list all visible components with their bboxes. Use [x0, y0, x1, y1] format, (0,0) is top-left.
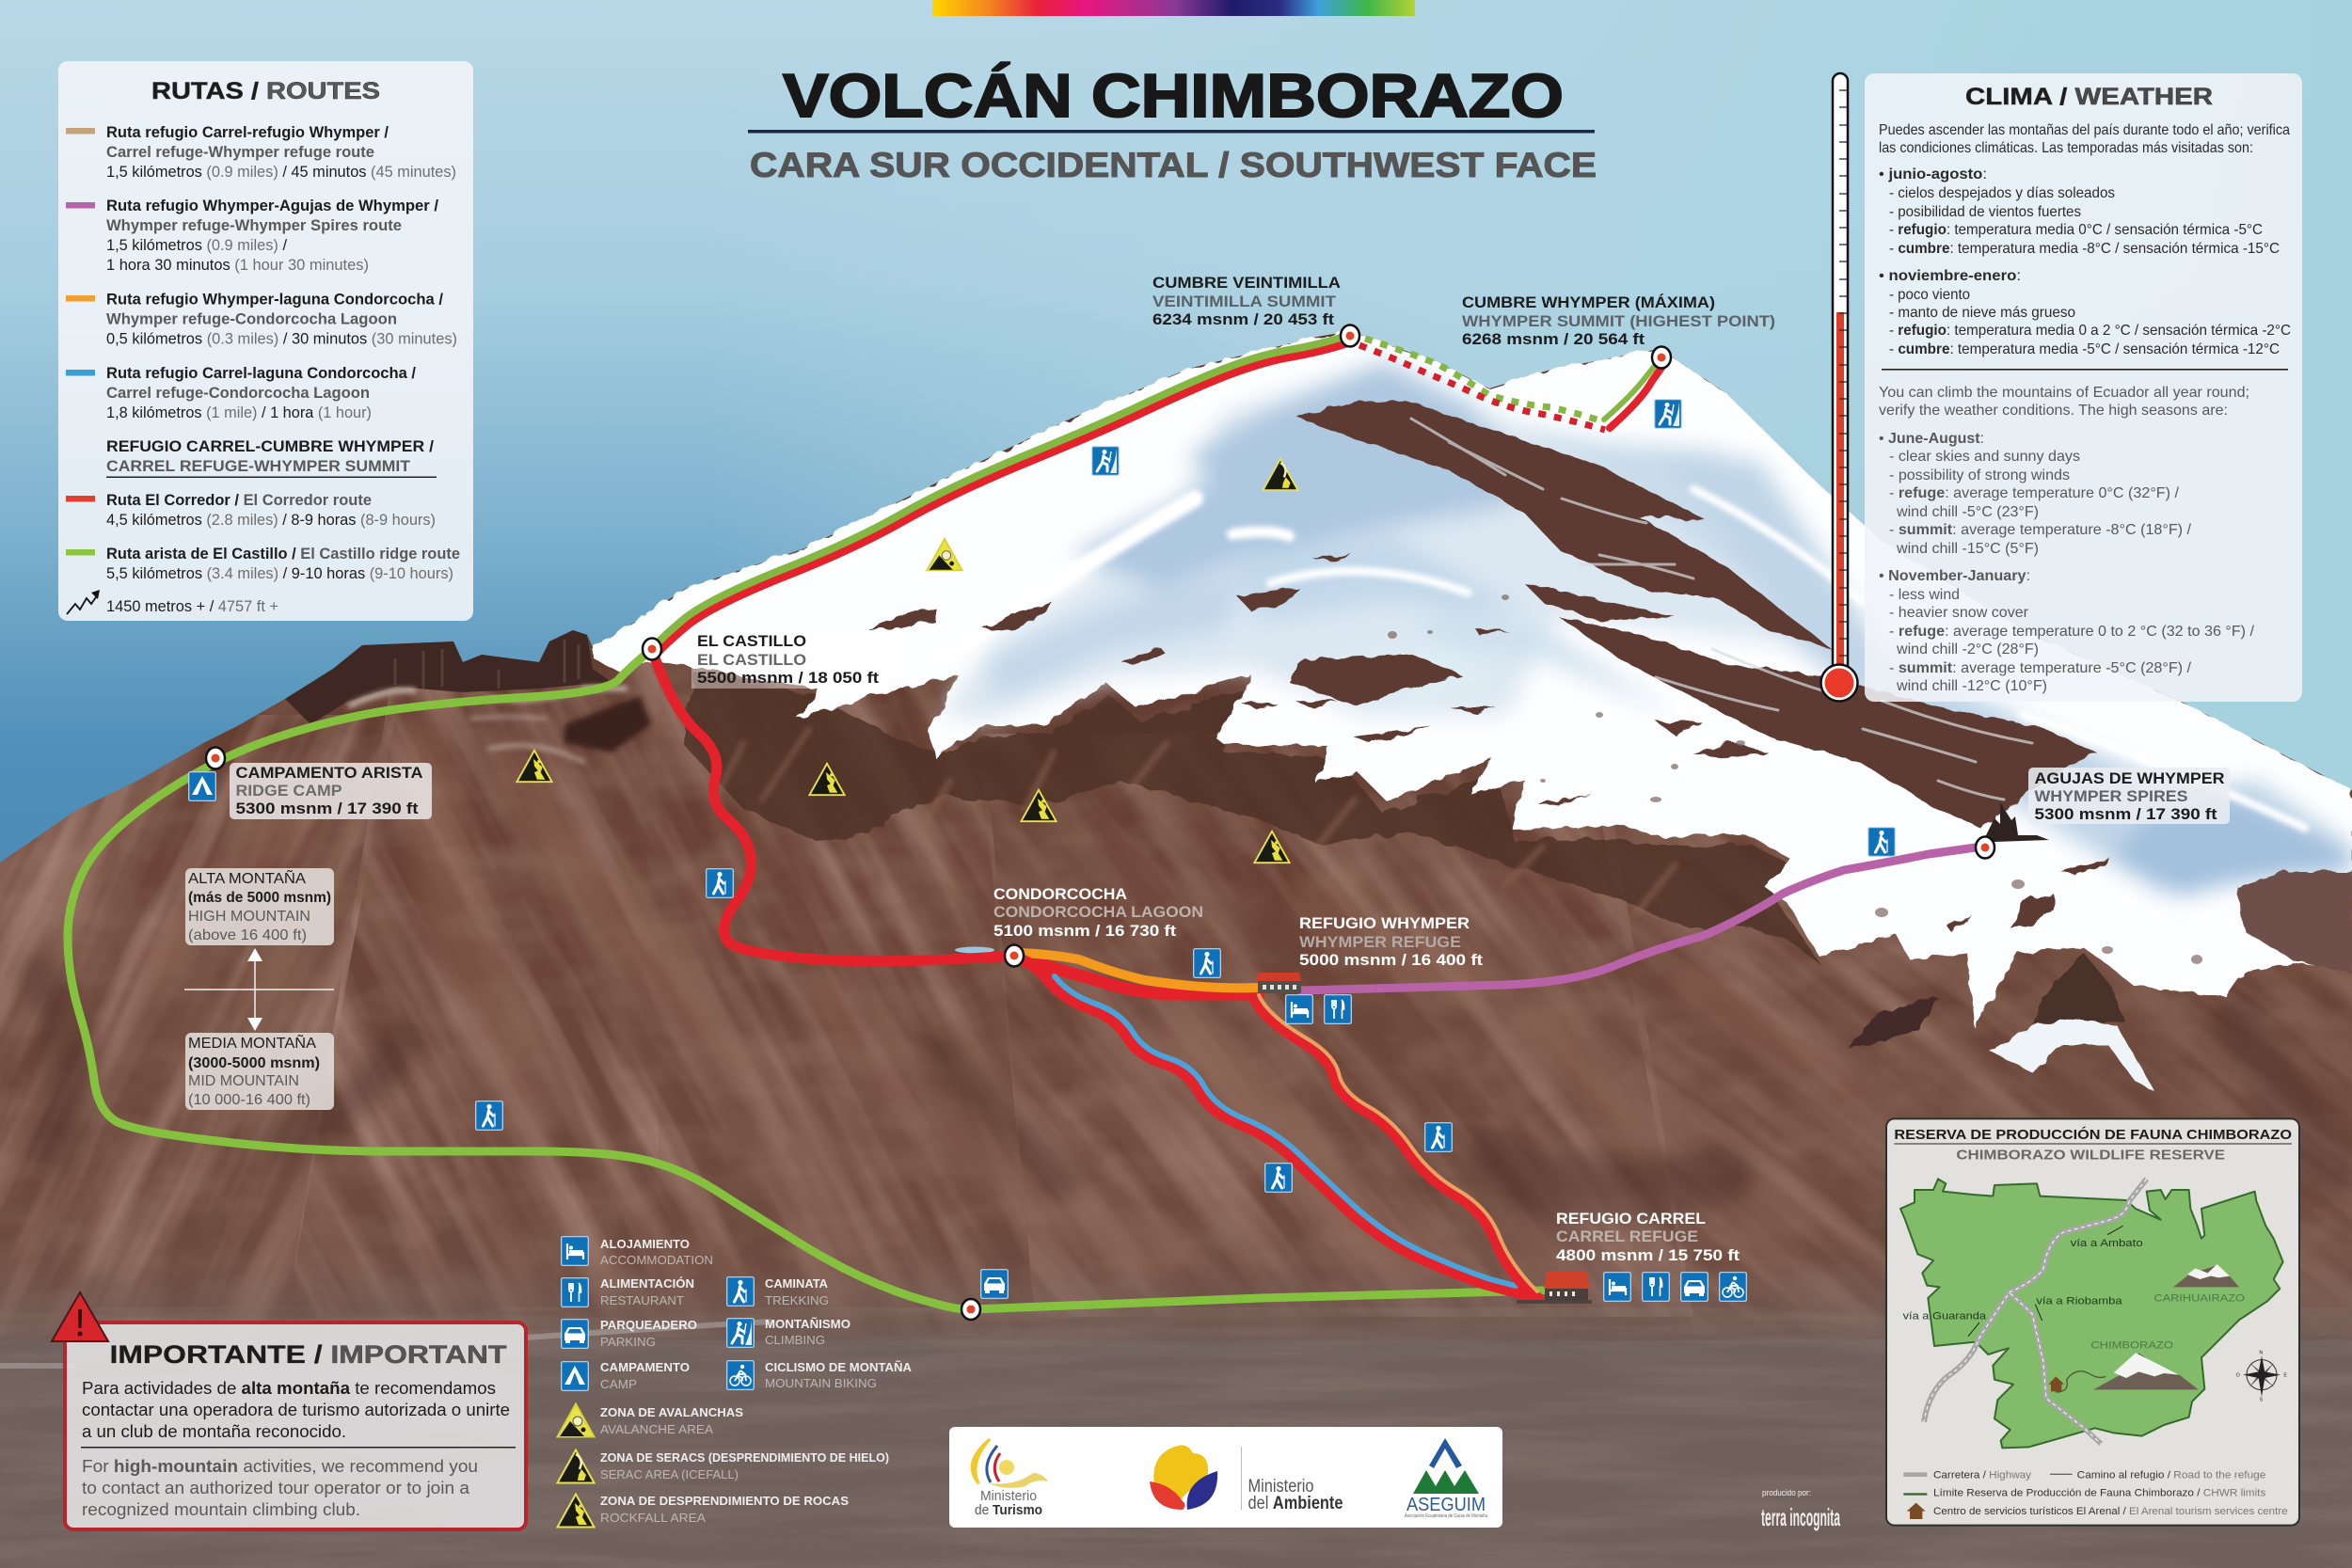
heading: important: IMPORTANTE / IMPORTANT [109, 1340, 507, 1369]
heading: weather: CLIMA / WEATHER [1965, 84, 2213, 110]
notice text: recognized mountain climbing club. [82, 1500, 360, 1519]
heading: reserve [1894, 1126, 2292, 1163]
icon: compass rose [2236, 1350, 2287, 1402]
weather text in Spanish: • noviembre-enero : [1879, 268, 2021, 284]
label: Whymper spires: 5300 msnm / 17 390 ft [2034, 805, 2217, 823]
elevation gain: 1450 metros + / 4757 ft + [106, 597, 278, 615]
label: mid mountain: (3000-5000 msnm) [188, 1055, 320, 1071]
label: Veintimilla summit: 6234 msnm / 20 453 ft [1152, 310, 1334, 328]
weather text in English: - summit: average temperature -5°C (28°F) / [1889, 660, 2192, 676]
snow cap [594, 331, 2352, 1091]
rock bands on the glacier [866, 400, 2111, 933]
route: El Corredor: Ruta El Corredor / El Corredor route [106, 491, 372, 509]
weather text in Spanish: - cumbre: temperatura media -8°C / sensación térmica -15°C [1889, 241, 2280, 257]
map icons [189, 400, 1895, 1301]
logo: Ministerio del Ambiente: Ministerio [1248, 1477, 1313, 1497]
map legend [1903, 1470, 2288, 1519]
legend: trekking: CAMINATA [765, 1276, 829, 1291]
label: Whymper refuge: REFUGIO WHYMPER [1299, 914, 1470, 932]
weather text in Spanish: - refugio: temperatura media 0°C / sensación térmica -5°C [1889, 222, 2263, 238]
legend: climbing: CLIMBING [765, 1333, 825, 1347]
route: El Castillo ridge: 5,5 kilómetros (3.4 miles) / 9-10 horas (9-10 hours) [106, 564, 453, 582]
title: VOLCÁN CHIMBORAZO [783, 61, 1564, 130]
label: Veintimilla summit: VEINTIMILLA SUMMIT [1152, 293, 1337, 310]
map labels: CARIHUAIRAZO [2153, 1292, 2245, 1304]
weather text in Spanish [1879, 122, 2291, 357]
route: El Corredor red line [652, 649, 1014, 961]
label: mid mountain: MEDIA MONTAÑA [188, 1033, 316, 1052]
weather text in Spanish: - posibilidad de vientos fuertes [1889, 204, 2081, 220]
map legend: Camino al refugio / Road to the refuge [2077, 1470, 2265, 1481]
route: dashed summit traverse [1359, 339, 1605, 430]
route: Whymper-Agujas: Ruta refugio Whymper-Agujas de Whymper / [106, 197, 438, 214]
highways [1924, 1179, 2147, 1444]
route: Whymper-Condorcocha: 0,5 kilómetros (0.3 miles) / 30 minutos (30 minutes) [106, 329, 457, 348]
arrows on map [1968, 1226, 2123, 1337]
route: El Corredor: 4,5 kilómetros (2.8 miles) / 8-9 horas (8-9 hours) [106, 511, 436, 529]
route: Carrel-Condorcocha [66, 364, 416, 421]
elevation gain [67, 590, 278, 615]
map legend: Límite Reserva de Producción de Fauna Chimborazo / CHWR limits [1933, 1488, 2265, 1499]
label: Whymper summit: 6268 msnm / 20 564 ft [1462, 330, 1645, 348]
weather text in English: - less wind [1889, 587, 1960, 603]
legend: mountain biking: CICLISMO DE MONTAÑA [765, 1360, 913, 1374]
label: mid mountain [185, 1033, 334, 1110]
label: high mountain: (above 16 400 ft) [188, 927, 307, 943]
notice text: to contact an authorized tour operator or to join a [82, 1479, 470, 1497]
text: terra incognita [1761, 1503, 1840, 1531]
label: Carrel refuge: REFUGIO CARREL [1556, 1210, 1706, 1227]
route: Carrel-Whymper: Ruta refugio Carrel-refugio Whymper / [106, 123, 389, 141]
label: Whymper summit: WHYMPER SUMMIT (HIGHEST POINT) [1462, 312, 1775, 330]
Whymper spires rock [1984, 802, 2049, 842]
legend: rockfall: ROCKFALL AREA [600, 1511, 706, 1525]
arrow: altitude divider [184, 948, 334, 1031]
label: Whymper spires: WHYMPER SPIRES [2034, 787, 2188, 805]
subheading: summit routes [106, 437, 437, 478]
producer credit: producido por: [1762, 1488, 1811, 1497]
panel: important notice [52, 1292, 526, 1529]
weather text in English [1879, 385, 2255, 694]
label: Whymper spires [2028, 768, 2230, 824]
weather text in Spanish: - refugio: temperatura media 0 a 2 °C / sensación térmica -2°C [1889, 323, 2291, 339]
logo: Ministerio de Turismo: de Turismo [975, 1502, 1042, 1518]
legend: serac: ZONA DE SERACS (DESPRENDIMIENTO DE HIELO) [600, 1450, 889, 1465]
route: Carrel-Whymper: Carrel refuge-Whymper refuge route [106, 143, 374, 161]
label: Whymper refuge [1299, 914, 1483, 969]
heading: routes: RUTAS / ROUTES [151, 78, 380, 104]
label: high mountain: ALTA MONTAÑA [188, 868, 306, 887]
label: El Castillo: EL CASTILLO [697, 651, 806, 669]
weather text in English: - summit: average temperature -8°C (18°F) / [1889, 522, 2192, 538]
map legend: Carretera / Highway [1933, 1470, 2032, 1481]
map labels: vía a Ambato [2071, 1238, 2143, 1249]
subheading: summit routes: CARREL REFUGE-WHYMPER SUMMIT [106, 457, 411, 475]
route: El Castillo ridge [66, 545, 460, 582]
label: Carrel refuge: 4800 msnm / 15 750 ft [1556, 1246, 1740, 1264]
label: El Castillo: 5500 msnm / 18 050 ft [697, 669, 879, 687]
legend: avalanche: ZONA DE AVALANCHAS [600, 1405, 743, 1419]
route: ridge green line [68, 649, 1543, 1309]
map labels: vía a Guaranda [1903, 1310, 1986, 1322]
label: ridge camp [230, 763, 432, 819]
legend: restaurant [562, 1276, 694, 1307]
label: Veintimilla summit [1152, 274, 1341, 328]
weather text in English: verify the weather conditions. The high seasons are: [1879, 403, 2228, 419]
map labels [1903, 1238, 2245, 1351]
legend: parking [562, 1318, 697, 1349]
route: green summit ridge [652, 337, 1343, 649]
notice text: For high-mountain activities, we recommend you [82, 1457, 478, 1476]
icon: compass rose: N [2259, 1350, 2263, 1355]
map labels: CHIMBORAZO [2090, 1339, 2173, 1351]
legend: climbing: MONTAÑISMO [765, 1317, 850, 1331]
weather text in English: - heavier snow cover [1889, 605, 2029, 621]
route: Carrel-Whymper: 1,5 kilómetros (0.9 miles) / 45 minutos (45 minutes) [106, 163, 456, 181]
legend: rockfall: ZONA DE DESPRENDIMIENTO DE ROCAS [600, 1494, 849, 1508]
weather text in English: - refuge: average temperature 0 to 2 °C (32 to 36 °F) / [1889, 624, 2255, 640]
weather text in Spanish: - manto de nieve más grueso [1889, 305, 2075, 321]
weather text in English: - clear skies and sunny days [1889, 449, 2080, 465]
route: Condorcocha to Carrel [1021, 959, 1538, 1298]
logo: ASEGUIM: Asociación Ecuatoriana de Guías de Montaña [1405, 1513, 1487, 1519]
route: Whymper-Condorcocha: Whymper refuge-Condorcocha Lagoon [106, 310, 397, 327]
label: Whymper refuge: 5000 msnm / 16 400 ft [1299, 951, 1483, 969]
weather text in Spanish: • junio-agosto: [1879, 166, 1987, 182]
route: final climb to Whymper summit [1604, 362, 1663, 428]
ground plain [0, 1260, 2352, 1568]
panel: weather [1865, 73, 2302, 702]
map legend: Centro de servicios turísticos El Arenal / El Arenal tourism services centre [1933, 1506, 2288, 1517]
route: Whymper refuge to spires [1301, 847, 1976, 990]
label: Condorcocha: CONDORCOCHA LAGOON [993, 903, 1203, 921]
route lines [68, 337, 1976, 1309]
icon: El Arenal house [2048, 1376, 2064, 1391]
label: Carrel refuge: CARREL REFUGE [1556, 1227, 1698, 1245]
building: Carrel refuge [1517, 1271, 1592, 1304]
panel: routes [58, 61, 473, 621]
notice text: Para actividades de alta montaña te recomendamos [82, 1379, 496, 1398]
reserve boundary map [1900, 1179, 2283, 1448]
weather text in English: wind chill -15°C (5°F) [1896, 541, 2039, 557]
legend: parking: PARQUEADERO [600, 1318, 697, 1332]
logo: ASEGUIM: ASEGUIM [1406, 1495, 1486, 1515]
sky background [0, 0, 2352, 941]
icon: compass rose: E [2283, 1373, 2287, 1379]
heading: reserve: CHIMBORAZO WILDLIFE RESERVE [1956, 1147, 2225, 1163]
weather text in English: wind chill -5°C (23°F) [1896, 504, 2039, 520]
lagoon [955, 946, 994, 954]
weather text in Spanish: - cielos despejados y días soleados [1889, 185, 2115, 201]
label: Condorcocha [993, 885, 1203, 940]
legend: camp: CAMP [600, 1377, 637, 1391]
legend: accommodation: ACCOMMODATION [600, 1253, 713, 1267]
snow speckles [1388, 594, 2202, 964]
route: Carrel-Whymper [66, 123, 456, 181]
brown slope at right [2237, 872, 2352, 974]
label: mid mountain: (10 000-16 400 ft) [188, 1092, 310, 1108]
logo: Ministerio de Turismo [972, 1439, 1048, 1518]
label: Whymper refuge: WHYMPER REFUGE [1299, 933, 1461, 951]
label: Condorcocha: 5100 msnm / 16 730 ft [993, 922, 1176, 940]
label: Condorcocha: CONDORCOCHA [993, 885, 1127, 903]
legend: camp [562, 1360, 690, 1391]
producer credit [1761, 1488, 1840, 1531]
legend: mountain biking [727, 1360, 913, 1390]
legend: avalanche: AVALANCHE AREA [600, 1422, 713, 1436]
weather text in English: wind chill -12°C (10°F) [1896, 678, 2047, 694]
legend: avalanche [557, 1403, 743, 1437]
icon: warning triangle [52, 1292, 108, 1341]
volcano illustration [0, 333, 2352, 1334]
icon legend [557, 1237, 913, 1528]
painted streak texture [0, 502, 2352, 1518]
legend: mountain biking: MOUNTAIN BIKING [765, 1376, 877, 1390]
label: Whymper spires: AGUJAS DE WHYMPER [2034, 769, 2224, 787]
route: El Corredor [66, 491, 436, 529]
label: ridge camp: RIDGE CAMP [235, 782, 342, 800]
route: Whymper-Agujas: 1,5 kilómetros (0.9 miles) / [106, 236, 287, 254]
weather text in English: You can climb the mountains of Ecuador all year round; [1879, 385, 2249, 401]
route: Whymper-Agujas: Whymper refuge-Whymper Spires route [106, 216, 402, 234]
route: Carrel-Condorcocha: Carrel refuge-Condorcocha Lagoon [106, 384, 370, 402]
label: high mountain [185, 868, 334, 945]
legend: restaurant: RESTAURANT [600, 1293, 684, 1307]
label: ridge camp: CAMPAMENTO ARISTA [235, 764, 423, 782]
route: Whymper-Condorcocha: Ruta refugio Whymper-laguna Condorcocha / [106, 290, 443, 309]
icon: compass rose: S [2260, 1397, 2264, 1402]
weather text in English: • November-January: [1879, 568, 2030, 584]
notice text: contactar una operadora de turismo autorizada o unirte [82, 1401, 510, 1419]
weather text in Spanish: - cumbre: temperatura media -5°C / sensación térmica -12°C [1889, 341, 2280, 357]
label: Whymper summit [1462, 293, 1775, 348]
legend: trekking: TREKKING [765, 1293, 829, 1307]
logo: Ministerio del Ambiente: del Ambiente [1248, 1494, 1343, 1513]
weather text in English: • June-August: [1879, 431, 1984, 447]
weather text in Spanish: - poco viento [1889, 287, 1970, 303]
legend: parking: PARKING [600, 1335, 656, 1349]
rainbow bar [932, 0, 1415, 16]
map labels: vía a Riobamba [2036, 1296, 2122, 1307]
label: Carrel refuge [1556, 1210, 1740, 1264]
label: high mountain: HIGH MOUNTAIN [188, 909, 310, 925]
rock band highlights [1411, 419, 2032, 800]
route: Whymper-Agujas [66, 197, 438, 274]
label: Veintimilla summit: CUMBRE VEINTIMILLA [1152, 274, 1341, 292]
icon: compass rose: O [2236, 1373, 2240, 1379]
legend: accommodation [562, 1237, 713, 1267]
route: Carrel-Condorcocha: Ruta refugio Carrel-laguna Condorcocha / [106, 364, 416, 382]
legend: accommodation: ALOJAMIENTO [600, 1237, 690, 1251]
legend: serac [557, 1450, 889, 1482]
logo: Ministerio del Ambiente [1150, 1445, 1343, 1513]
weather text in English: wind chill -2°C (28°F) [1896, 641, 2039, 657]
label: El Castillo [691, 632, 894, 689]
route: red summit ridge [655, 343, 1346, 656]
notice text: a un club de montaña reconocido. [82, 1422, 346, 1441]
snow shading [941, 360, 2352, 896]
thermometer [1821, 73, 1857, 702]
legend: serac: SERAC AREA (ICEFALL) [600, 1467, 739, 1481]
location markers [206, 325, 1994, 1320]
label: ridge camp: 5300 msnm / 17 390 ft [235, 800, 419, 817]
logo: Ministerio de Turismo: Ministerio [980, 1488, 1037, 1504]
route: Whymper refuge to Carrel [1254, 995, 1537, 1295]
panel: wildlife reserve map [1886, 1118, 2299, 1526]
route: Whymper-Agujas: 1 hora 30 minutos (1 hour 30 minutes) [106, 256, 369, 274]
Castillo rock wall [285, 630, 626, 762]
logo: ASEGUIM [1405, 1438, 1487, 1519]
subheading: summit routes: REFUGIO CARREL-CUMBRE WHYMPER / [106, 437, 434, 455]
weather text in English: - possibility of strong winds [1889, 467, 2070, 483]
logos panel [949, 1427, 1502, 1528]
legend: trekking [727, 1276, 829, 1307]
legend: camp: CAMPAMENTO [600, 1360, 690, 1374]
label: El Castillo: EL CASTILLO [697, 632, 806, 650]
route: Condorcocha to Whymper refuge [1014, 953, 1259, 994]
route: Whymper-Condorcocha [66, 290, 457, 348]
weather text in Spanish: Puedes ascender las montañas del país durante todo el año; verifica [1879, 122, 2290, 138]
icon: mountains [2093, 1264, 2239, 1389]
legend: restaurant: ALIMENTACIÓN [600, 1276, 694, 1291]
label: mid mountain: MID MOUNTAIN [188, 1073, 299, 1089]
weather text in Spanish: las condiciones climáticas. Las temporadas más visitadas son: [1879, 140, 2253, 156]
title [748, 61, 1597, 184]
label: Whymper summit: CUMBRE WHYMPER (MÁXIMA) [1462, 293, 1715, 311]
notice text [81, 1379, 516, 1519]
building: Whymper refuge [1256, 973, 1301, 993]
label: high mountain: (más de 5000 msnm) [188, 890, 331, 906]
legend: climbing [727, 1317, 850, 1347]
legend: rockfall [557, 1494, 849, 1528]
subtitle: CARA SUR OCCIDENTAL / SOUTHWEST FACE [750, 146, 1597, 184]
heading: reserve: RESERVA DE PRODUCCIÓN DE FAUNA CHIMBORAZO [1894, 1126, 2292, 1143]
weather text in English: - refuge: average temperature 0°C (32°F) / [1889, 485, 2180, 501]
route: Carrel-Condorcocha: 1,8 kilómetros (1 mile) / 1 hora (1 hour) [106, 404, 372, 421]
route: El Castillo ridge: Ruta arista de El Castillo / El Castillo ridge route [106, 545, 460, 562]
